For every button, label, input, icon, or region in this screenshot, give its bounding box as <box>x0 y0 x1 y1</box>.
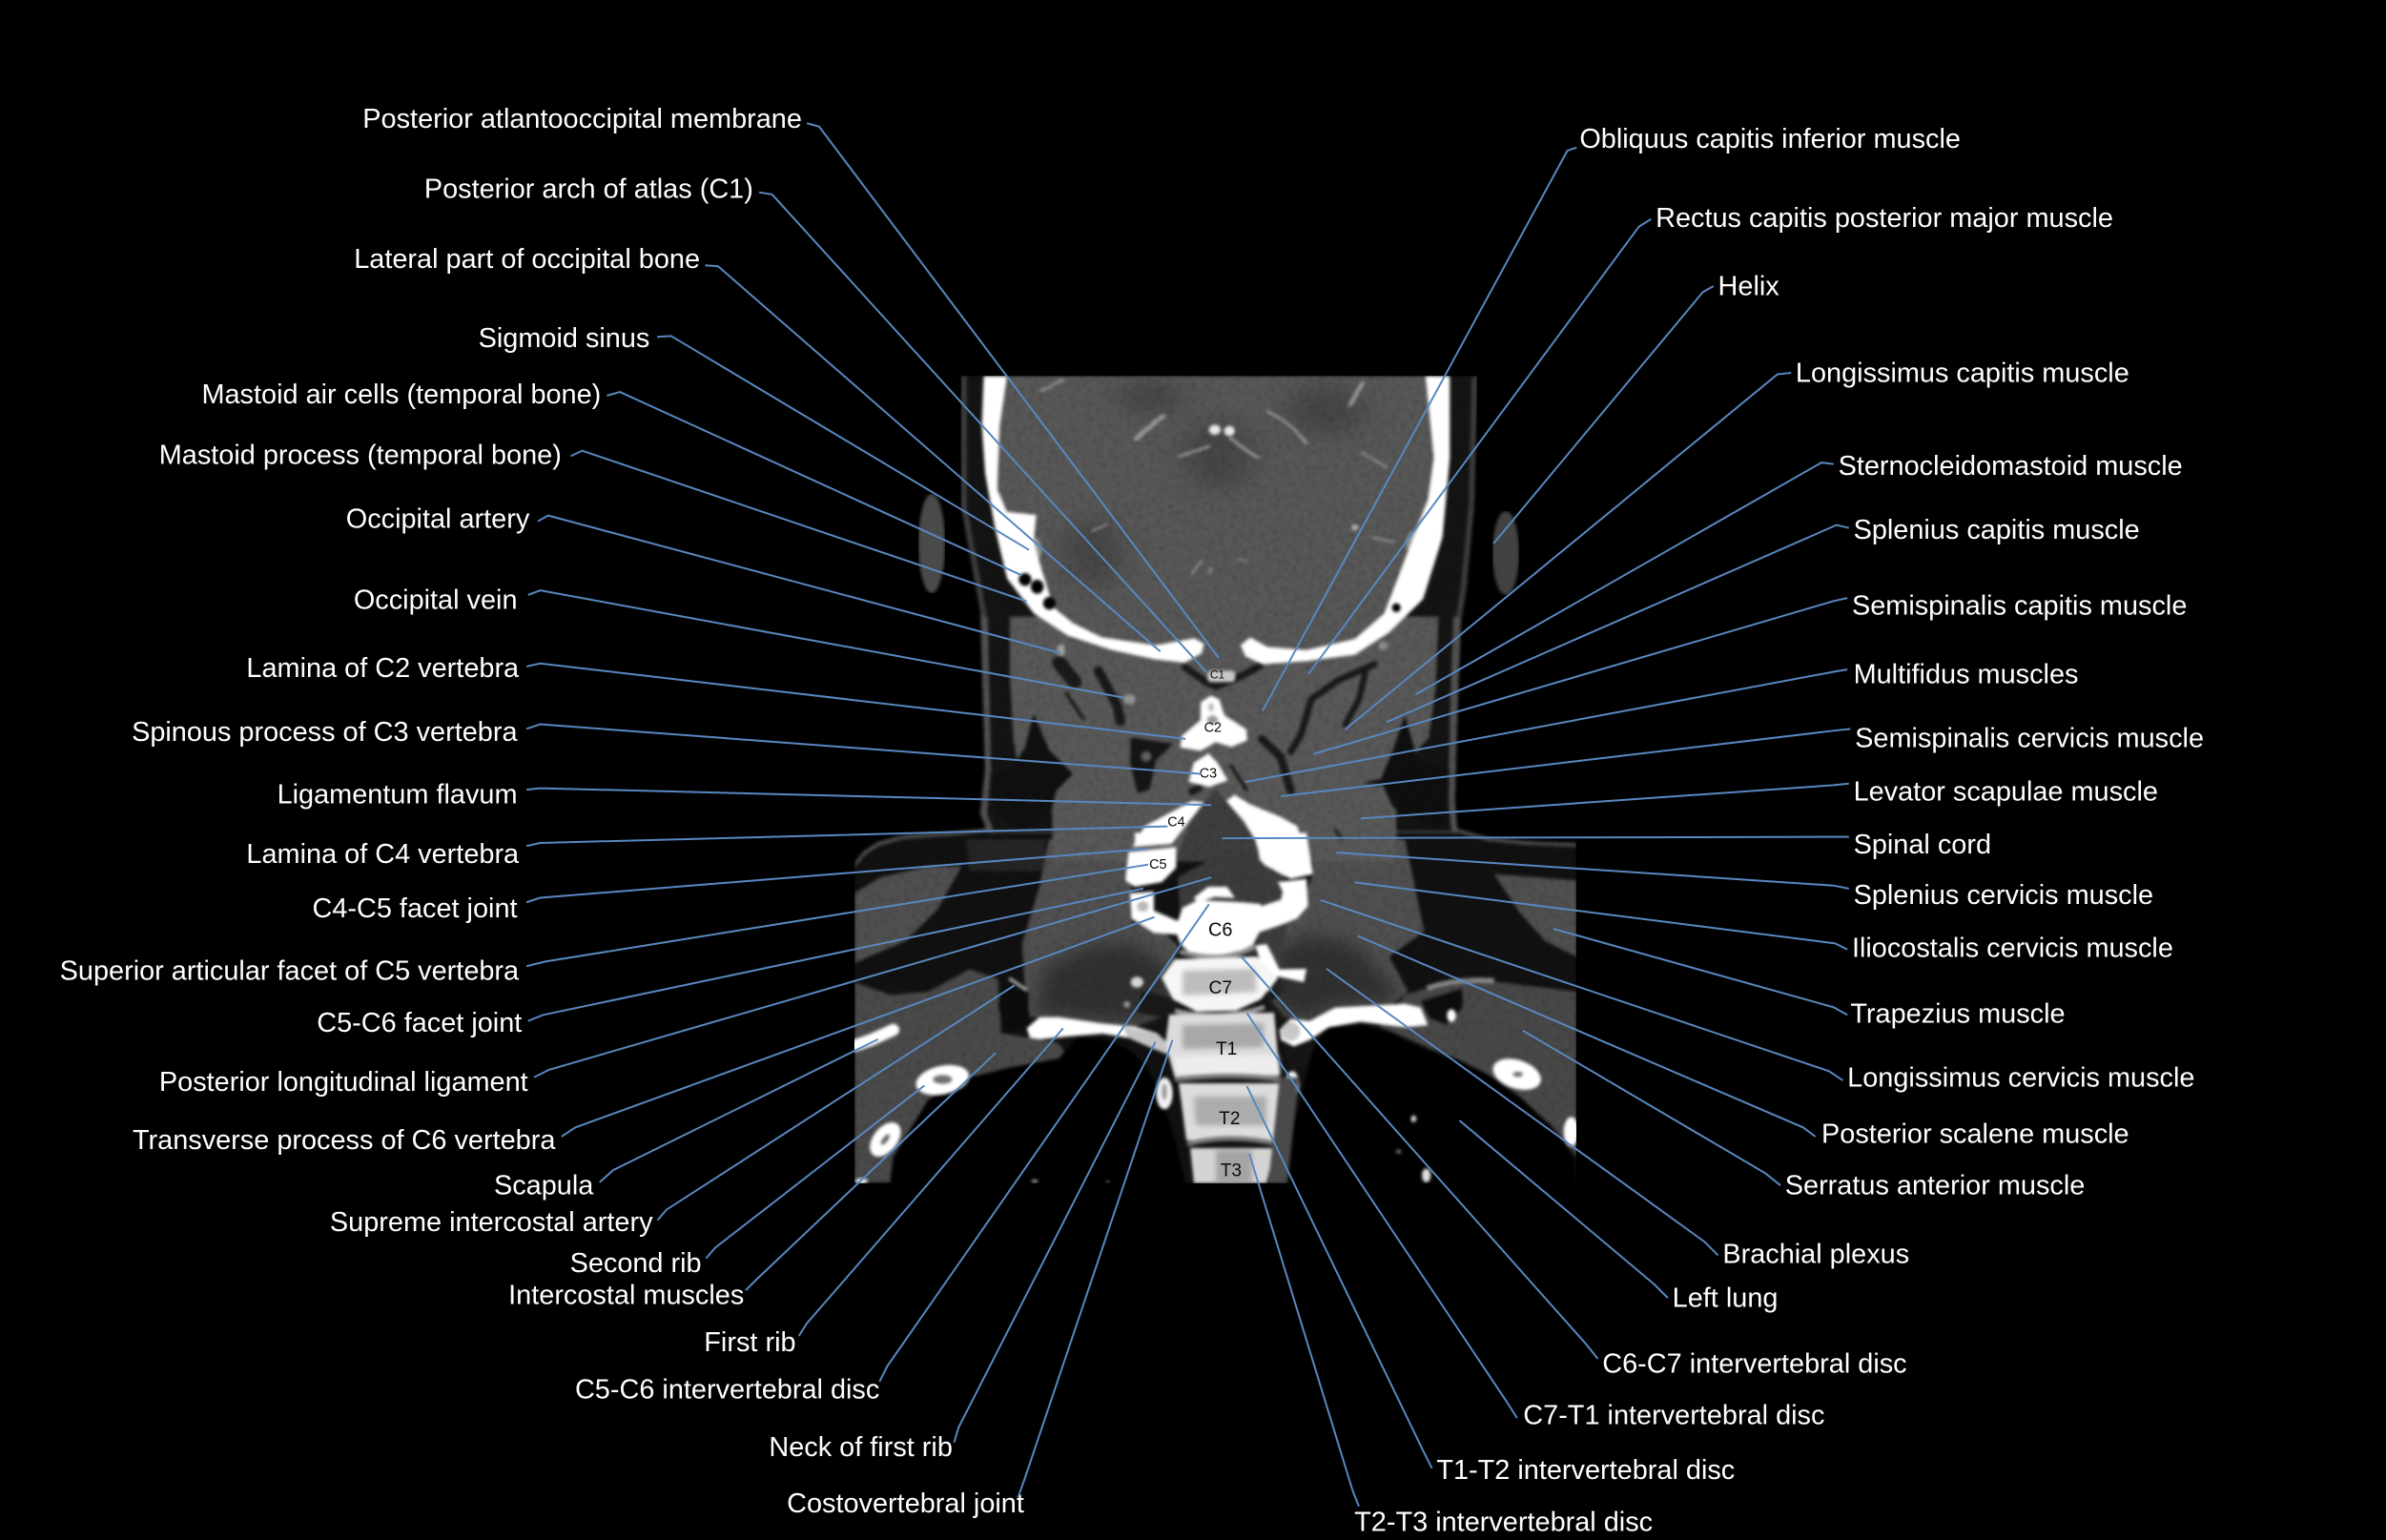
label: Superior articular facet of C5 vertebra: Superior articular facet of C5 vertebra <box>60 956 520 987</box>
label: Occipital vein <box>354 585 1123 698</box>
chest and shoulders skin <box>854 827 1576 868</box>
C5 <box>1135 832 1173 846</box>
mastoid air cells <box>1018 573 1401 612</box>
left deep fat tint <box>966 839 1046 871</box>
label: Obliquus capitis inferior muscle: Obliquus capitis inferior muscle <box>1579 124 1961 154</box>
vertebra labels: C2 <box>1204 721 1222 736</box>
transverse C7 left <box>1131 976 1143 988</box>
third rib right <box>1564 1117 1579 1146</box>
left lung <box>890 1037 1185 1184</box>
label: Mastoid air cells (temporal bone) <box>201 380 1021 575</box>
right lung <box>1273 1025 1576 1184</box>
label: Costovertebral joint: Costovertebral joint <box>787 1489 1024 1519</box>
retrorib fat <box>1281 1037 1316 1073</box>
pleura beside spine <box>1268 1078 1299 1183</box>
label: C6-C7 intervertebral disc: C6-C7 intervertebral disc <box>1602 1348 1907 1379</box>
label: Iliocostalis cervicis muscle: Iliocostalis cervicis muscle <box>1852 934 2173 964</box>
neck fat <box>987 607 1453 832</box>
lower cervical bones, right <box>1256 832 1579 1182</box>
second rib right <box>1489 1053 1545 1096</box>
label: Mastoid process (temporal bone) <box>159 441 1026 602</box>
cerebral vessels <box>1041 380 1394 574</box>
T2 body <box>1179 1083 1280 1140</box>
label: Neck of first rib: Neck of first rib <box>769 1432 953 1463</box>
label: Lamina of C2 vertebra <box>246 653 1185 739</box>
C5-C7 and thoracic spine <box>1162 900 1299 1183</box>
label: Transverse process of C6 vertebra: Transverse process of C6 vertebra <box>133 1125 556 1156</box>
label: Posterior longitudinal ligament: Posterior longitudinal ligament <box>159 1067 528 1098</box>
fascial fat planes <box>1059 663 1374 839</box>
label: Semispinalis cervicis muscle: Semispinalis cervicis muscle <box>1855 723 2204 753</box>
C1 arch <box>1207 670 1235 682</box>
vertebra labels: T1 <box>1216 1039 1237 1059</box>
vertebra labels <box>1149 668 1242 1181</box>
label: Posterior atlantooccipital membrane: Posterior atlantooccipital membrane <box>362 104 802 134</box>
label: Posterior atlantooccipital membrane <box>362 104 1219 658</box>
label: Posterior longitudinal ligament <box>159 877 1211 1098</box>
left chest soft tissue <box>854 839 1180 1182</box>
first rib left <box>1027 1017 1170 1056</box>
neck muscles <box>1010 607 1439 861</box>
label: Ligamentum flavum: Ligamentum flavum <box>278 780 518 811</box>
vertebra labels: C6 <box>1208 919 1233 940</box>
label: Splenius cervicis muscle <box>1336 852 2153 911</box>
cervical neck block <box>980 607 1462 861</box>
C4 left lamina <box>1132 801 1203 847</box>
left ear <box>918 494 945 593</box>
vertebra labels: C7 <box>1209 978 1232 998</box>
right dark pocket <box>1421 989 1462 1024</box>
label: C6-C7 intervertebral disc <box>1241 955 1907 1379</box>
label: First rib: First rib <box>704 1327 796 1358</box>
label: Brachial plexus: Brachial plexus <box>1722 1239 1909 1269</box>
label: Lateral part of occipital bone: Lateral part of occipital bone <box>354 244 700 275</box>
label: Supreme intercostal artery: Supreme intercostal artery <box>330 1207 653 1238</box>
left trapezius <box>854 866 961 963</box>
right ear <box>1492 511 1519 595</box>
label: Sternocleidomastoid muscle: Sternocleidomastoid muscle <box>1839 451 2183 482</box>
black base of scan <box>849 372 1583 1187</box>
label: C5-C6 facet joint: C5-C6 facet joint <box>317 1008 522 1038</box>
vessels left <box>1032 1180 1038 1182</box>
label: C5-C6 intervertebral disc: C5-C6 intervertebral disc <box>575 1374 879 1405</box>
label: Costovertebral joint <box>787 1040 1172 1519</box>
label: C7-T1 intervertebral disc <box>1247 1013 1824 1431</box>
label: T2-T3 intervertebral disc <box>1249 1154 1653 1537</box>
label: Serratus anterior muscle: Serratus anterior muscle <box>1785 1171 2085 1201</box>
scalp fat <box>967 376 1471 617</box>
label: Occipital vein: Occipital vein <box>354 585 518 615</box>
label: Second rib <box>570 1085 924 1279</box>
C4 right lamina <box>1226 794 1306 861</box>
label: Mastoid process (temporal bone): Mastoid process (temporal bone) <box>159 441 562 471</box>
label: Splenius capitis muscle <box>1387 515 2140 722</box>
label: Longissimus capitis muscle: Longissimus capitis muscle <box>1796 359 2129 389</box>
right vessels strip <box>1428 980 1494 989</box>
label: Posterior arch of atlas (C1) <box>424 174 1206 672</box>
upper cervical bones <box>1132 670 1306 861</box>
C5-C6 pillar <box>1130 892 1185 934</box>
label: Mastoid air cells (temporal bone): Mastoid air cells (temporal bone) <box>201 380 601 410</box>
label: Posterior scalene muscle: Posterior scalene muscle <box>1821 1119 2129 1149</box>
label: Intercostal muscles <box>508 1053 996 1311</box>
C7 body <box>1162 956 1278 1012</box>
label: Helix: Helix <box>1718 272 1779 302</box>
scapula <box>854 1030 894 1046</box>
first rib right <box>1280 1004 1428 1046</box>
vertebra labels: C3 <box>1200 766 1217 781</box>
C6 arch <box>1194 887 1235 903</box>
lung and canal lower <box>1178 849 1287 954</box>
right chest soft tissue <box>1262 839 1576 1157</box>
label: Serratus anterior muscle <box>1523 1031 2085 1201</box>
left neck muscle <box>1022 839 1180 1027</box>
left chest wall <box>854 970 1068 1182</box>
label: Levator scapulae muscle <box>1361 776 2158 818</box>
label: Obliquus capitis inferior muscle <box>1263 124 1961 711</box>
subcutaneous fat of chest <box>854 832 1576 1183</box>
costal head <box>1156 1078 1173 1109</box>
C2 <box>1180 695 1247 750</box>
scalp skin <box>961 376 1477 617</box>
label: Occipital artery: Occipital artery <box>346 504 530 535</box>
label: Rectus capitis posterior major muscle: Rectus capitis posterior major muscle <box>1656 203 2113 234</box>
T1 body <box>1165 1013 1280 1078</box>
label: Lamina of C4 vertebra: Lamina of C4 vertebra <box>246 839 520 870</box>
occipital vein <box>1123 694 1136 705</box>
vertebra labels: C1 <box>1210 668 1225 682</box>
label: Multifidus muscles: Multifidus muscles <box>1854 659 2078 689</box>
label: Posterior arch of atlas (C1): Posterior arch of atlas (C1) <box>424 174 753 204</box>
label: Longissimus cervicis muscle <box>1321 900 2194 1093</box>
T1-T2 disc <box>1175 1076 1280 1079</box>
spinal canal upper <box>1175 789 1258 861</box>
C6-C7 disc <box>1180 946 1255 957</box>
label: C4-C5 facet joint: C4-C5 facet joint <box>312 893 518 924</box>
label: C5-C6 intervertebral disc <box>575 904 1209 1405</box>
vertebra labels: C4 <box>1167 814 1185 830</box>
label: Semispinalis capitis muscle <box>1313 591 2187 754</box>
vertebra labels: T3 <box>1221 1160 1242 1181</box>
label: Multifidus muscles <box>1245 659 2078 782</box>
T2-T3 disc <box>1187 1139 1278 1144</box>
label: Lamina of C4 vertebra <box>246 827 1167 870</box>
second rib <box>913 1060 972 1099</box>
label: Spinous process of C3 vertebra: Spinous process of C3 vertebra <box>132 717 518 748</box>
brain <box>996 376 1435 618</box>
label: Occipital artery <box>346 504 1060 653</box>
transverse C7 right <box>1256 944 1306 992</box>
label: Supreme intercostal artery <box>330 985 1015 1238</box>
label: T1-T2 intervertebral disc: T1-T2 intervertebral disc <box>1436 1455 1735 1486</box>
C5-C6 right pillar <box>1257 879 1308 933</box>
label: Left lung <box>1459 1120 1778 1314</box>
label: Brachial plexus <box>1327 969 1909 1269</box>
dark pocket behind C2 <box>1130 737 1173 793</box>
label: Longissimus capitis muscle <box>1346 359 2129 729</box>
skull <box>981 376 1450 665</box>
third rib <box>864 1117 907 1162</box>
label: Sigmoid sinus: Sigmoid sinus <box>479 323 649 354</box>
label: C4-C5 facet joint <box>312 849 1148 924</box>
C3 <box>1188 753 1227 787</box>
label: Intercostal muscles: Intercostal muscles <box>508 1281 744 1311</box>
left labels <box>60 104 1219 1519</box>
C5 right <box>1256 832 1313 879</box>
subclavian contrast <box>1447 1009 1456 1022</box>
label: Ligamentum flavum <box>278 780 1211 811</box>
label: Splenius cervicis muscle: Splenius cervicis muscle <box>1854 880 2153 911</box>
label: First rib <box>704 1028 1063 1358</box>
label: T1-T2 intervertebral disc <box>1247 1086 1735 1486</box>
label: Semispinalis capitis muscle: Semispinalis capitis muscle <box>1852 591 2187 622</box>
right outer neck dark <box>1364 715 1450 811</box>
right chest wall <box>1380 980 1576 1157</box>
label: Semispinalis cervicis muscle <box>1281 723 2204 796</box>
occipital artery <box>1057 644 1065 656</box>
neck skin <box>980 607 1462 832</box>
left outer neck dark <box>1015 713 1074 812</box>
label: T2-T3 intervertebral disc: T2-T3 intervertebral disc <box>1354 1507 1653 1537</box>
right deep muscle shading <box>1273 934 1397 1018</box>
skull right <box>1241 376 1450 665</box>
label: Sigmoid sinus <box>479 323 1029 550</box>
label: C5-C6 facet joint <box>317 889 1143 1038</box>
label: Splenius capitis muscle: Splenius capitis muscle <box>1854 515 2140 545</box>
brachial vessels left <box>1009 978 1027 990</box>
sigmoid sinus <box>1032 536 1043 560</box>
right labels <box>1223 124 2204 1537</box>
costal head right <box>1286 1071 1299 1098</box>
label: Sternocleidomastoid muscle <box>1415 451 2183 694</box>
vertebra labels: T2 <box>1219 1109 1240 1129</box>
vertebra labels: C5 <box>1149 857 1167 873</box>
label: Helix <box>1493 272 1779 544</box>
label: Spinous process of C3 vertebra <box>132 717 1202 774</box>
C6 body <box>1175 900 1261 955</box>
label: Iliocostalis cervicis muscle <box>1355 882 2173 964</box>
left dark pocket <box>998 990 1030 1011</box>
CT grain <box>849 372 1583 1187</box>
label: Levator scapulae muscle: Levator scapulae muscle <box>1854 776 2158 807</box>
label: Transverse process of C6 vertebra <box>133 917 1155 1156</box>
label: Scapula <box>494 1039 878 1201</box>
label: Rectus capitis posterior major muscle <box>1308 203 2113 674</box>
label: Spinal cord: Spinal cord <box>1854 830 1991 860</box>
label: Superior articular facet of C5 vertebra <box>60 865 1148 987</box>
lung vessels <box>1411 1116 1416 1122</box>
left deep muscle shading <box>1035 944 1176 1022</box>
label: Scapula: Scapula <box>494 1171 594 1201</box>
brain shading <box>1063 381 1365 588</box>
label: Neck of first rib <box>769 1042 1156 1463</box>
label: Longissimus cervicis muscle: Longissimus cervicis muscle <box>1847 1062 2194 1093</box>
label: Left lung: Left lung <box>1673 1283 1778 1314</box>
lung fields <box>890 1025 1576 1184</box>
label: Trapezius muscle: Trapezius muscle <box>1850 998 2066 1029</box>
right neck muscle <box>1262 839 1424 1020</box>
right trapezius <box>1494 874 1576 956</box>
basilar vessels <box>1209 424 1221 435</box>
C7-T1 disc <box>1175 1007 1265 1016</box>
lower cervical bones, left <box>854 832 1235 1183</box>
skull left <box>981 376 1204 663</box>
label: Lamina of C2 vertebra: Lamina of C2 vertebra <box>246 653 520 684</box>
label: Posterior scalene muscle <box>1357 935 2129 1149</box>
label: C7-T1 intervertebral disc: C7-T1 intervertebral disc <box>1523 1401 1824 1431</box>
brain and scalp block <box>961 376 1477 618</box>
label: Second rib: Second rib <box>570 1248 702 1279</box>
label: Trapezius muscle <box>1553 929 2066 1029</box>
label: Lateral part of occipital bone <box>354 244 1161 651</box>
T3 body <box>1190 1148 1275 1183</box>
CT scan image <box>849 372 1583 1187</box>
